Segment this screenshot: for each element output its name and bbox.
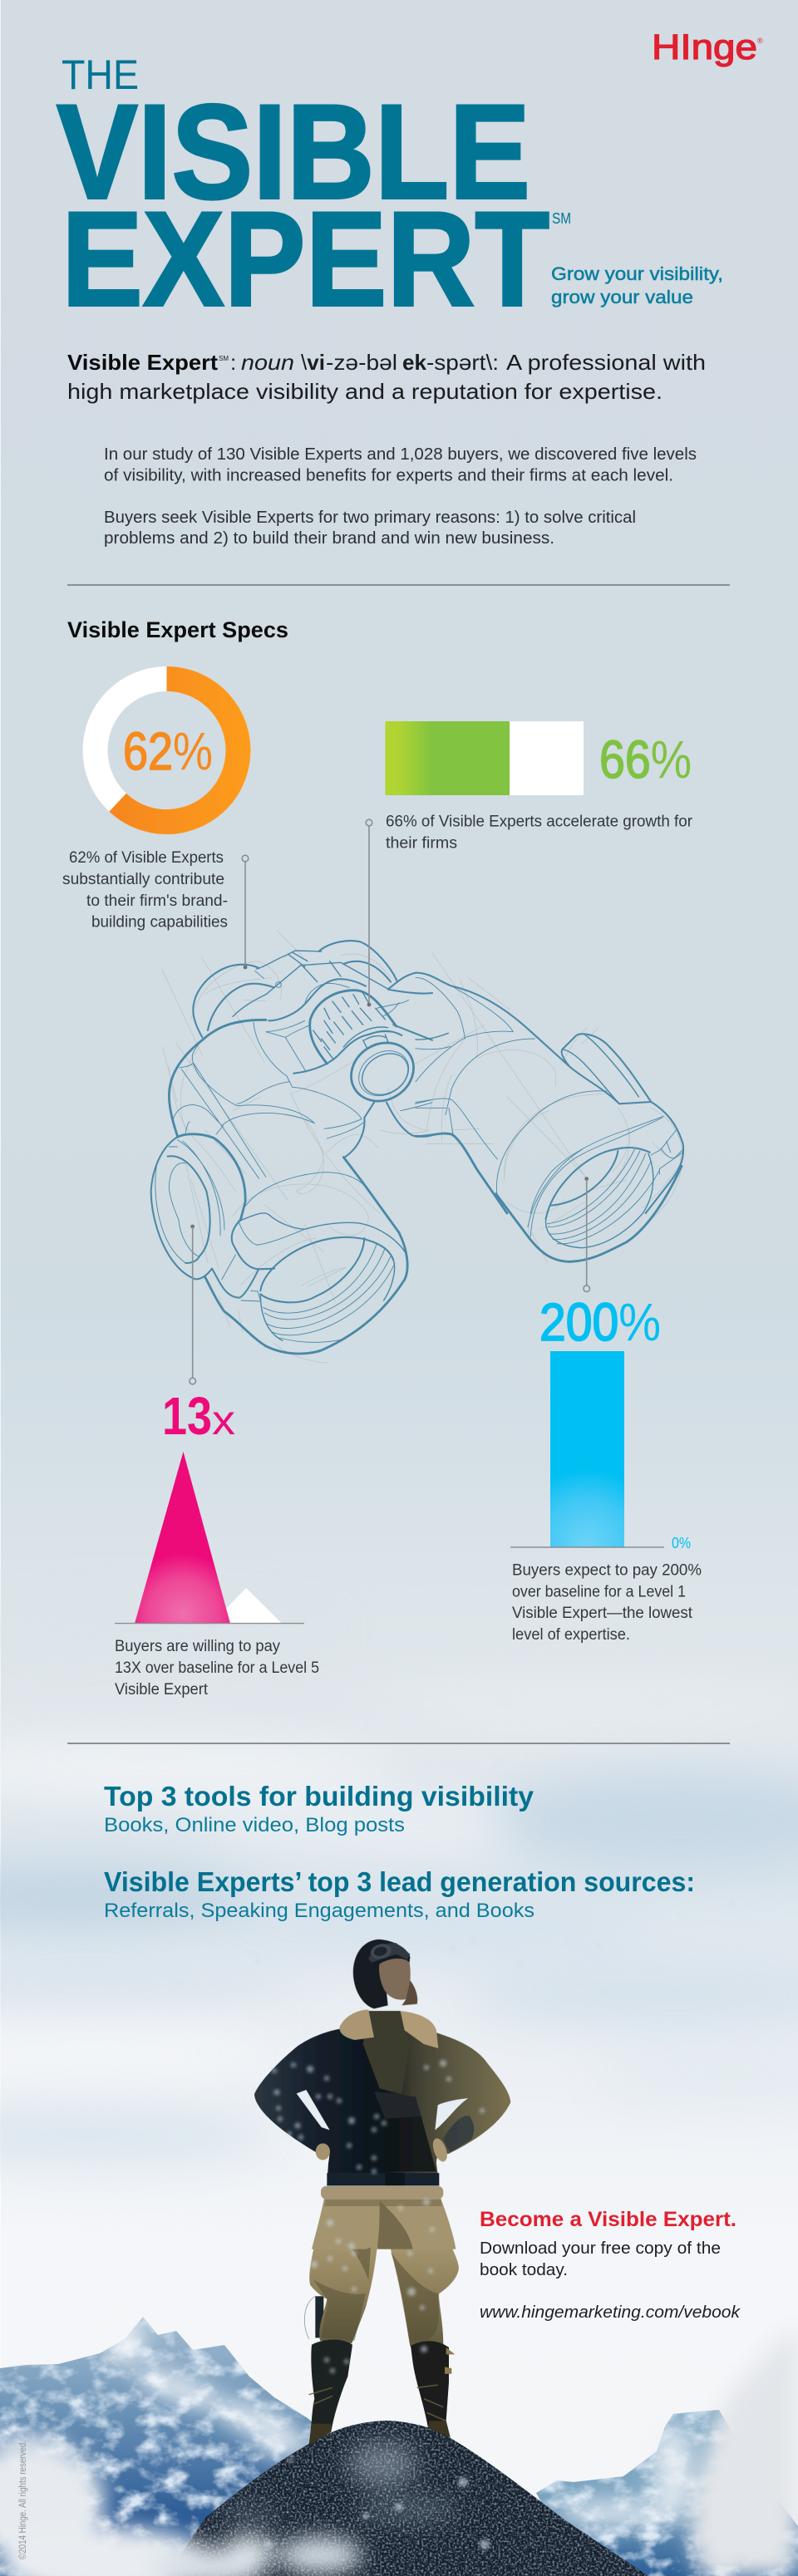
chart: 13x triangles: x bbox=[212, 1397, 235, 1443]
text block: top 3 tools bbox=[104, 1781, 534, 1836]
intro paragraphs bbox=[104, 445, 697, 548]
caption: 62%: 62% of Visible Experts bbox=[69, 849, 224, 867]
definition: Visible Expert bbox=[67, 350, 218, 375]
text block: top 3 tools: Top 3 tools for building visibility bbox=[104, 1781, 534, 1812]
binoculars: lens left and body bbox=[151, 1134, 407, 1354]
chart: 62% donut bbox=[95, 679, 238, 822]
definition: SM bbox=[219, 355, 229, 362]
chart: 13x triangles: 13 bbox=[162, 1386, 212, 1446]
background clouds bbox=[0, 1604, 798, 2162]
call to action: Download your free copy of the bbox=[480, 2239, 721, 2258]
caption: 66%: their firms bbox=[386, 834, 457, 853]
caption: 13x bbox=[115, 1638, 319, 1698]
intro paragraphs: In our study of 130 Visible Experts and 1,028 buyers, we discovered five levels bbox=[104, 445, 697, 464]
definition: : bbox=[230, 350, 236, 375]
definition: noun bbox=[241, 350, 294, 375]
illustration: binoculars sketch bbox=[151, 819, 683, 1384]
chart: 66% bar bbox=[386, 721, 692, 795]
sketch lines: construction bbox=[162, 931, 682, 1363]
text block: top 3 lead generation sources bbox=[104, 1866, 695, 1922]
definition: A professional with bbox=[506, 350, 706, 375]
callout leader: 62% bbox=[242, 855, 249, 969]
chart: 62% donut: 62% bbox=[123, 721, 213, 781]
photo: clouds behind rock bbox=[0, 2313, 693, 2527]
caption: 13x: Buyers are willing to pay bbox=[115, 1638, 280, 1655]
definition: \vi bbox=[301, 350, 325, 375]
caption: 62% bbox=[62, 849, 228, 931]
call to action: Become a Visible Expert. bbox=[480, 2208, 736, 2231]
logo: Hinge: HInge bbox=[652, 27, 757, 67]
photo: aviator figure bbox=[254, 1792, 734, 2549]
chart: 200% column bbox=[510, 1292, 691, 1551]
intro paragraphs: problems and 2) to build their brand and win new business. bbox=[104, 529, 554, 548]
figure: legs bbox=[304, 2238, 459, 2445]
text block: top 3 lead generation sources: Visible Experts’ top 3 lead generation sources: bbox=[104, 1866, 695, 1897]
photo: rock summit bbox=[166, 2421, 648, 2576]
callout leader: 200% bbox=[584, 1177, 590, 1291]
definition bbox=[67, 350, 706, 404]
tagline bbox=[551, 263, 723, 307]
caption: 62%: to their firm's brand- bbox=[86, 892, 228, 910]
title bbox=[57, 52, 571, 334]
call to action bbox=[480, 2208, 741, 2322]
binoculars: outline right top bbox=[416, 973, 683, 1213]
definition: -spərt\: bbox=[426, 350, 499, 375]
definition: ek bbox=[402, 350, 427, 375]
caption: 62%: building capabilities bbox=[91, 914, 228, 931]
photo: mountains left bbox=[0, 2317, 341, 2576]
definition: high marketplace visibility and a reputation for expertise. bbox=[67, 379, 663, 404]
photo: foreground clouds bbox=[0, 2443, 362, 2576]
caption: 66%: 66% of Visible Experts accelerate growth for bbox=[386, 813, 693, 831]
caption: 200%: Visible Expert—the lowest bbox=[512, 1605, 693, 1622]
binoculars: lens right bbox=[496, 1118, 682, 1261]
intro paragraphs: of visibility, with increased benefits for experts and their firms at each level. bbox=[104, 467, 673, 485]
call to action: book today. bbox=[480, 2261, 568, 2279]
title: THE bbox=[62, 52, 139, 98]
photo: right fog bank bbox=[690, 2327, 798, 2576]
intro paragraphs: Buyers seek Visible Experts for two primary reasons: 1) to solve critical bbox=[104, 509, 636, 527]
chart: 13x triangles bbox=[115, 1386, 304, 1624]
title: EXPERT bbox=[62, 184, 549, 334]
caption: 62%: substantially contribute bbox=[62, 871, 224, 888]
title: SM bbox=[552, 210, 571, 227]
text block: top 3 lead generation sources: Referrals, Speaking Engagements, and Books bbox=[104, 1900, 534, 1922]
chart: 66% bar: 66% bbox=[599, 730, 692, 789]
caption: 13x: Visible Expert bbox=[115, 1681, 209, 1698]
callout leader: 13x bbox=[190, 1225, 196, 1384]
tagline: Grow your visibility, bbox=[551, 263, 723, 284]
call to action: www.hingemarketing.com/vebook bbox=[480, 2303, 741, 2322]
figure: snow flakes bbox=[255, 1792, 734, 2549]
caption: 200%: over baseline for a Level 1 bbox=[512, 1584, 686, 1600]
heading: Visible Expert Specs: Visible Expert Specs bbox=[67, 617, 288, 642]
figure: torso bbox=[254, 1939, 510, 2249]
caption: 13x: 13X over baseline for a Level 5 bbox=[115, 1659, 319, 1677]
caption: 200% bbox=[512, 1562, 702, 1644]
logo: Hinge: ® bbox=[757, 37, 763, 45]
binoculars: outline left top bbox=[169, 941, 432, 1178]
caption: 200%: level of expertise. bbox=[512, 1626, 630, 1644]
caption: 200%: Buyers expect to pay 200% bbox=[512, 1562, 702, 1579]
chart: 200% column: 0% bbox=[672, 1535, 691, 1551]
chart: 200% column: 200% bbox=[539, 1292, 661, 1352]
title: VISIBLE bbox=[57, 76, 530, 228]
text block: top 3 tools: Books, Online video, Blog posts bbox=[104, 1814, 405, 1836]
photo: mountains right bbox=[536, 2410, 798, 2576]
tagline: grow your value bbox=[551, 287, 693, 307]
copyright note: ©2014 Hinge. All rights reserved. bbox=[18, 2441, 28, 2559]
callout leader: 66% bbox=[366, 819, 372, 1006]
definition: -zə-bəl bbox=[326, 350, 397, 375]
caption: 66% bbox=[386, 813, 693, 853]
